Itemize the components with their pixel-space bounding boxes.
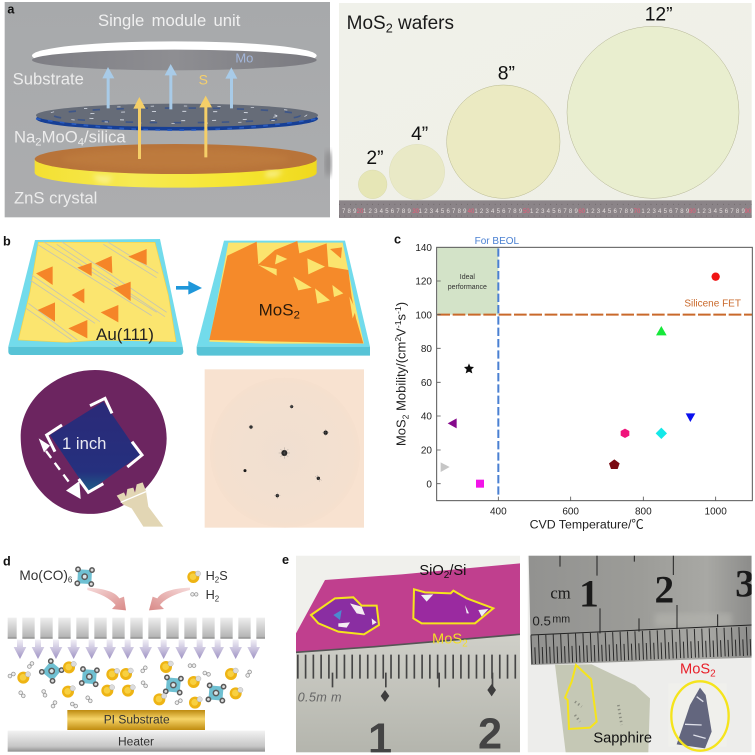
label: MoS2 red: MoS xyxy=(680,661,710,677)
diffraction pattern xyxy=(205,369,364,528)
dashed double arrow xyxy=(39,438,81,499)
label: SiO2/Si: 2 xyxy=(444,570,450,581)
PI substrate: PI Substrate xyxy=(104,713,170,727)
ruler: 30 xyxy=(412,209,420,215)
legend: H2: 2 xyxy=(215,594,220,603)
arrows: S vapour xyxy=(133,96,212,159)
sapphire wafer piece xyxy=(555,664,650,752)
y axis ticks and labels: 60 xyxy=(421,378,432,389)
y axis title: -1 xyxy=(393,306,403,314)
panel e: flakes on substrates xyxy=(282,553,755,755)
ruler: 123456789 xyxy=(363,209,413,215)
MoS2 flake left xyxy=(311,597,379,634)
panel a: MoS2 wafers photo xyxy=(339,3,752,218)
legend: Mo(CO)6: 6 xyxy=(68,575,73,584)
axes frame xyxy=(437,247,752,501)
arrow: precursor flow left xyxy=(87,588,126,610)
label: MoS2 yellow: 2 xyxy=(462,638,468,649)
MoS2 sample in circle xyxy=(668,681,729,751)
ruler numerals and units: 2 xyxy=(654,568,674,612)
wafer 12 inch: 12” xyxy=(645,5,673,26)
x axis ticks and labels: 800 xyxy=(635,507,652,518)
legend: H2S xyxy=(187,569,228,584)
ruler numerals and units: mm xyxy=(552,613,570,625)
data markers xyxy=(441,272,720,488)
wafer 4 inch: 4” xyxy=(411,124,428,145)
ruler: 123456789 xyxy=(474,209,524,215)
label: MoS2: MoS xyxy=(259,301,294,320)
wafer 4 inch xyxy=(389,124,445,200)
ruler: 70 xyxy=(634,209,641,215)
label: Na2MoO4/silica: 2 xyxy=(35,137,42,149)
label: SiO2/Si: /Si xyxy=(449,563,466,579)
y axis title: MoS xyxy=(394,419,409,446)
panel c: mobility vs temperature scatter chart xyxy=(393,233,752,532)
panel label b: b xyxy=(3,235,11,249)
ZnS crystal disk xyxy=(35,144,317,188)
MoS2 flake right xyxy=(413,589,493,623)
ruler numerals and units: 0.5 xyxy=(532,614,551,629)
y axis ticks and labels: 140 xyxy=(415,243,432,254)
y axis title: -1 xyxy=(393,320,403,328)
label: Sapphire: Sapphire xyxy=(593,730,652,746)
label: MoS2 red: 2 xyxy=(710,668,716,679)
wafer 12 inch xyxy=(567,5,739,198)
ruler: 90 xyxy=(745,209,752,215)
x axis ticks and labels: 400 xyxy=(490,507,507,518)
legend: H2S: 2 xyxy=(215,575,220,584)
y axis title: 2 xyxy=(400,414,410,419)
x axis ticks and labels: 1000 xyxy=(705,507,727,518)
reference line: For BEOL: For BEOL xyxy=(475,236,520,247)
legend: Mo(CO)6 xyxy=(19,567,94,586)
arrows: Mo vapour xyxy=(102,64,237,109)
gas molecules xyxy=(7,658,252,709)
label: Na2MoO4/silica: /silica xyxy=(84,128,126,147)
label: MoS2: 2 xyxy=(294,310,300,322)
panel d: CVD reactor schematic xyxy=(3,555,265,752)
ruler: 40 xyxy=(468,209,475,215)
PI substrate xyxy=(67,710,205,730)
ruler: 50 xyxy=(523,209,530,215)
ruler: 123456789 xyxy=(530,209,580,215)
label: 0.5 mm: 0.5m m xyxy=(298,691,342,705)
y axis title: s xyxy=(394,313,409,320)
label: Na2MoO4/silica: Na xyxy=(14,128,35,147)
heading: MoS2 wafers: 2 xyxy=(386,22,393,36)
ruler: 123456789 xyxy=(641,209,691,215)
panel label a: a xyxy=(7,2,15,16)
photo: SiO2/Si with ruler xyxy=(296,556,520,755)
label: Substrate: Substrate xyxy=(13,69,84,88)
heading: MoS2 wafers: MoS xyxy=(347,13,386,34)
substrate disk xyxy=(32,41,317,70)
label: MoS2 yellow: MoS xyxy=(432,631,462,647)
y axis ticks and labels: 80 xyxy=(421,344,432,355)
panel a: single module unit schematic xyxy=(5,2,332,217)
y axis title: 2 xyxy=(393,337,403,342)
ideal performance region: Ideal xyxy=(460,274,475,281)
ruler numerals and units: 3 xyxy=(735,562,755,606)
legend: H2 xyxy=(191,588,220,603)
ideal performance region xyxy=(437,248,498,315)
legend: Mo(CO)6: Mo(CO) xyxy=(19,568,68,583)
panel label d: d xyxy=(3,555,11,569)
y axis ticks and labels: 0 xyxy=(426,479,432,490)
heater: Heater xyxy=(118,734,154,748)
y axis ticks and labels: 120 xyxy=(415,277,432,288)
label: Au(111): Au(111) xyxy=(96,325,154,344)
ruler: 123456789 xyxy=(697,209,747,215)
label: ZnS crystal: ZnS crystal xyxy=(14,188,97,207)
shower head xyxy=(8,618,265,639)
heading: MoS2 wafers: wafers xyxy=(393,13,454,34)
panel label c: c xyxy=(394,233,401,247)
panel b: growth on Au(111) xyxy=(3,235,370,528)
wafer 8 inch xyxy=(447,63,560,198)
x axis title: CVD Temperature/℃ xyxy=(530,518,644,532)
panel label e: e xyxy=(282,553,289,567)
ruler numerals and units: cm xyxy=(550,583,571,602)
arrow: precursor flow right xyxy=(149,588,190,610)
plate: continuous MoS2 film xyxy=(197,241,370,356)
y axis title: ) xyxy=(394,302,409,306)
wafer photo: 1 inch single crystal xyxy=(21,370,167,527)
ruler xyxy=(339,200,752,218)
legend: H2S: H xyxy=(206,569,215,583)
arrow: growth direction xyxy=(176,281,202,295)
y axis ticks and labels: 20 xyxy=(421,446,432,457)
yellow outline on sapphire flake xyxy=(565,665,622,729)
y axis title: V xyxy=(394,328,409,337)
y axis ticks and labels: 100 xyxy=(415,310,432,321)
ruler: 789 xyxy=(342,209,359,215)
x axis ticks and labels xyxy=(490,497,727,518)
y axis ticks and labels xyxy=(415,243,441,490)
y axis title: Mobility/(cm xyxy=(394,342,409,415)
plate: Au(111) with triangles xyxy=(8,239,183,355)
heater xyxy=(8,731,265,752)
ruler: 20 xyxy=(357,209,364,215)
ruler numerals and units: 1 xyxy=(579,571,599,615)
ruler: 123456789 xyxy=(586,209,636,215)
ruler: 80 xyxy=(689,209,696,215)
label: SiO2/Si: SiO xyxy=(419,563,444,579)
label: S: S xyxy=(199,71,208,87)
legend: H2: H xyxy=(206,588,215,602)
reference line: Silicene FET: Silicene FET xyxy=(684,299,741,310)
label: Na2MoO4/silica: 4 xyxy=(78,137,84,149)
x axis ticks and labels: 600 xyxy=(562,507,579,518)
heading: single module unit: Single module unit xyxy=(98,11,241,30)
label: 1 inch: 1 inch xyxy=(62,434,106,453)
ideal performance region: performance xyxy=(448,284,487,291)
icon: tweezers xyxy=(117,482,163,527)
label: Mo: Mo xyxy=(235,51,253,66)
ruler numerals and units xyxy=(532,570,752,626)
wafer 8 inch: 8” xyxy=(498,63,515,84)
gas flow arrows xyxy=(14,640,260,659)
ruler: 123456789 xyxy=(419,209,469,215)
photo: sapphire with steel ruler xyxy=(528,556,755,752)
wafer 2 inch: 2” xyxy=(366,148,384,169)
Na2MoO4 silica disk xyxy=(36,104,318,131)
ruler: 60 xyxy=(578,209,586,215)
y axis ticks and labels: 40 xyxy=(421,412,432,423)
ruler numerals xyxy=(370,718,500,752)
label: Na2MoO4/silica: MoO xyxy=(42,128,78,147)
legend: H2S: S xyxy=(219,569,228,583)
wafer 2 inch xyxy=(358,148,387,199)
